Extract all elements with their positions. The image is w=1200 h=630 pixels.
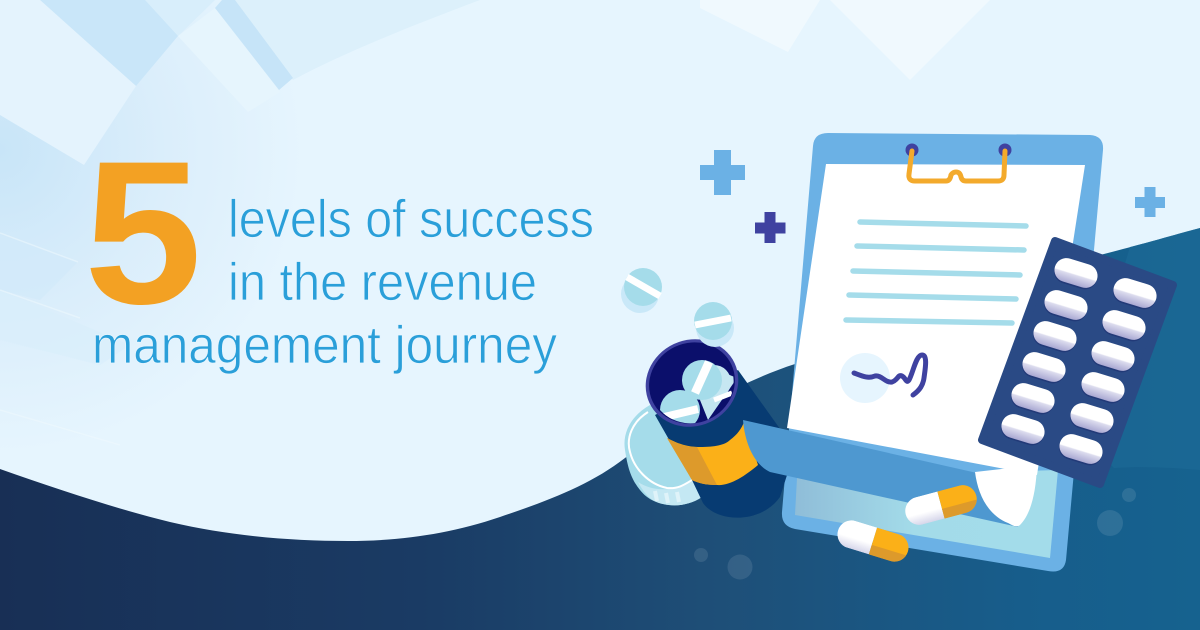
icon: small plus bbox=[1135, 187, 1165, 217]
bottle opening bbox=[636, 328, 748, 438]
pills in bottle bbox=[660, 360, 734, 424]
pill bottle bbox=[646, 339, 787, 518]
capsule right bbox=[905, 485, 977, 525]
bottle label shade bbox=[667, 438, 717, 485]
document text lines bbox=[846, 222, 1026, 323]
clipboard board bbox=[782, 133, 1103, 572]
paper sheet bbox=[787, 164, 1085, 475]
heading text: in the revenue bbox=[228, 253, 537, 312]
capsule bottom bbox=[838, 520, 908, 562]
bottle cap bbox=[624, 405, 702, 505]
heading text: management journey bbox=[92, 316, 557, 375]
heading text bbox=[92, 190, 594, 375]
clipboard inner panel bbox=[795, 470, 1058, 558]
folded flap bbox=[743, 420, 1018, 527]
icon: purple plus bbox=[755, 212, 786, 243]
icon: tablet left bbox=[621, 268, 662, 313]
bottle rim bbox=[631, 324, 753, 442]
clip bbox=[906, 144, 1012, 181]
heading text: levels of success bbox=[228, 190, 594, 249]
blister pack bbox=[982, 241, 1173, 484]
big number 5: 5 bbox=[84, 119, 202, 347]
clipboard bbox=[782, 133, 1103, 572]
signature bbox=[840, 353, 926, 403]
bottle body bbox=[655, 370, 795, 518]
paper curl bbox=[975, 465, 1037, 526]
wave: dark bottom band bbox=[0, 228, 1200, 630]
bottle label bbox=[667, 422, 758, 485]
icon: tablet above bottle bbox=[694, 302, 734, 347]
icon: large plus bbox=[700, 150, 745, 195]
